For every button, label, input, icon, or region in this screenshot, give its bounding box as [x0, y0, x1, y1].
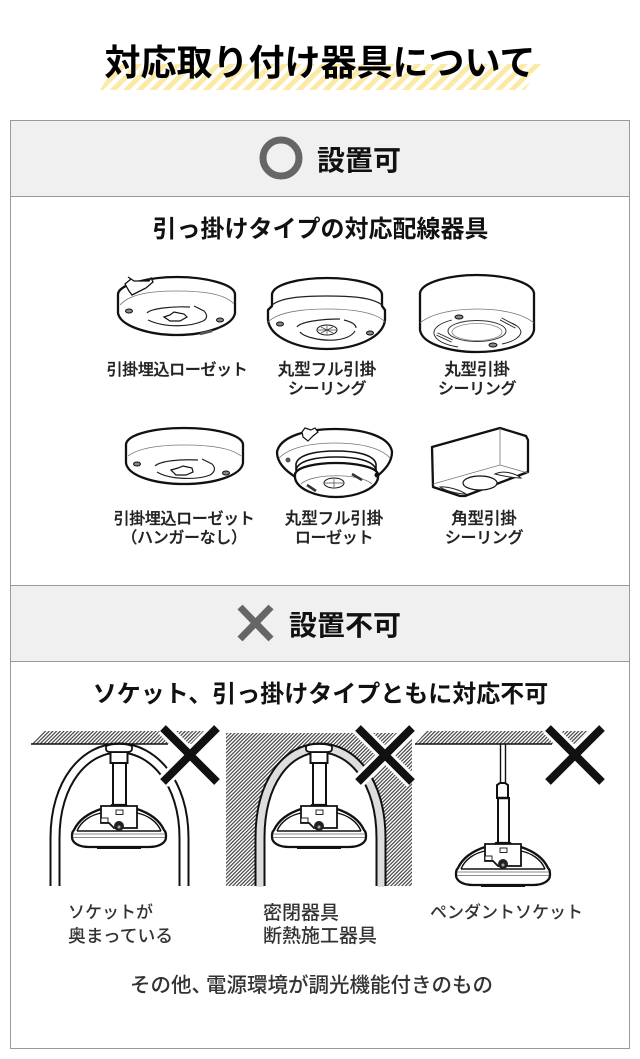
subheading: compatible fixtures: 引っ掛けタイプの対応配線器具 [152, 216, 488, 243]
heading: installable: 設置可 [317, 145, 401, 176]
icon: square ceiling [432, 428, 528, 496]
label: シーリング [445, 529, 523, 547]
caption: sealed fixture: 断熱施工器具 [263, 925, 377, 947]
caption: recessed socket [68, 902, 173, 946]
label: （ハンガーなし） [121, 529, 247, 547]
label: 丸型引掛 [444, 360, 510, 379]
illustration: sealed fixture [226, 728, 412, 887]
caption: pendant socket: ペンダントソケット [430, 902, 583, 922]
caption: recessed socket: ソケットが [68, 902, 153, 922]
icon: round full rosette [277, 428, 392, 497]
label [438, 360, 516, 398]
label: ローゼット [295, 529, 373, 547]
panel: installable header [11, 121, 629, 196]
label [445, 509, 523, 547]
label: 引掛埋込ローゼット [114, 510, 254, 528]
icon: round full ceiling [268, 278, 385, 349]
icon: embedded rosette [118, 277, 235, 335]
title text: 対応取り付け器具について [105, 42, 535, 83]
heading: not installable: 設置不可 [289, 610, 401, 641]
caption: recessed socket: 奥まっている [68, 926, 173, 946]
label [114, 510, 254, 547]
label: 丸型フル引掛 [285, 509, 384, 528]
label: 角型引掛 [451, 509, 517, 528]
icon: x mark [358, 728, 412, 782]
icon: round ceiling [420, 275, 534, 352]
icon: cross mark [240, 607, 271, 639]
icon: circle mark [263, 140, 299, 176]
label [278, 360, 377, 398]
caption: sealed fixture: 密閉器具 [263, 902, 339, 924]
subheading: incompatible: ソケット、引っ掛けタイプともに対応不可 [93, 681, 548, 708]
icon: x mark [163, 728, 217, 782]
icon: x mark [548, 728, 602, 782]
caption: sealed fixture [263, 902, 377, 947]
title highlight stripes [100, 64, 541, 90]
label: 引掛埋込ローゼット [107, 361, 247, 379]
icon: embedded rosette without hanger [126, 428, 243, 484]
title [100, 42, 541, 90]
note: other conditions: その他、電源環境が調光機能付きのもの [130, 974, 493, 997]
label [285, 509, 384, 547]
label: シーリング [438, 380, 516, 398]
label: シーリング [288, 380, 366, 398]
illustration: recessed socket [31, 728, 217, 887]
illustration: pendant socket [415, 728, 602, 886]
panel: not installable header [11, 586, 629, 662]
label: 丸型フル引掛 [278, 360, 377, 379]
